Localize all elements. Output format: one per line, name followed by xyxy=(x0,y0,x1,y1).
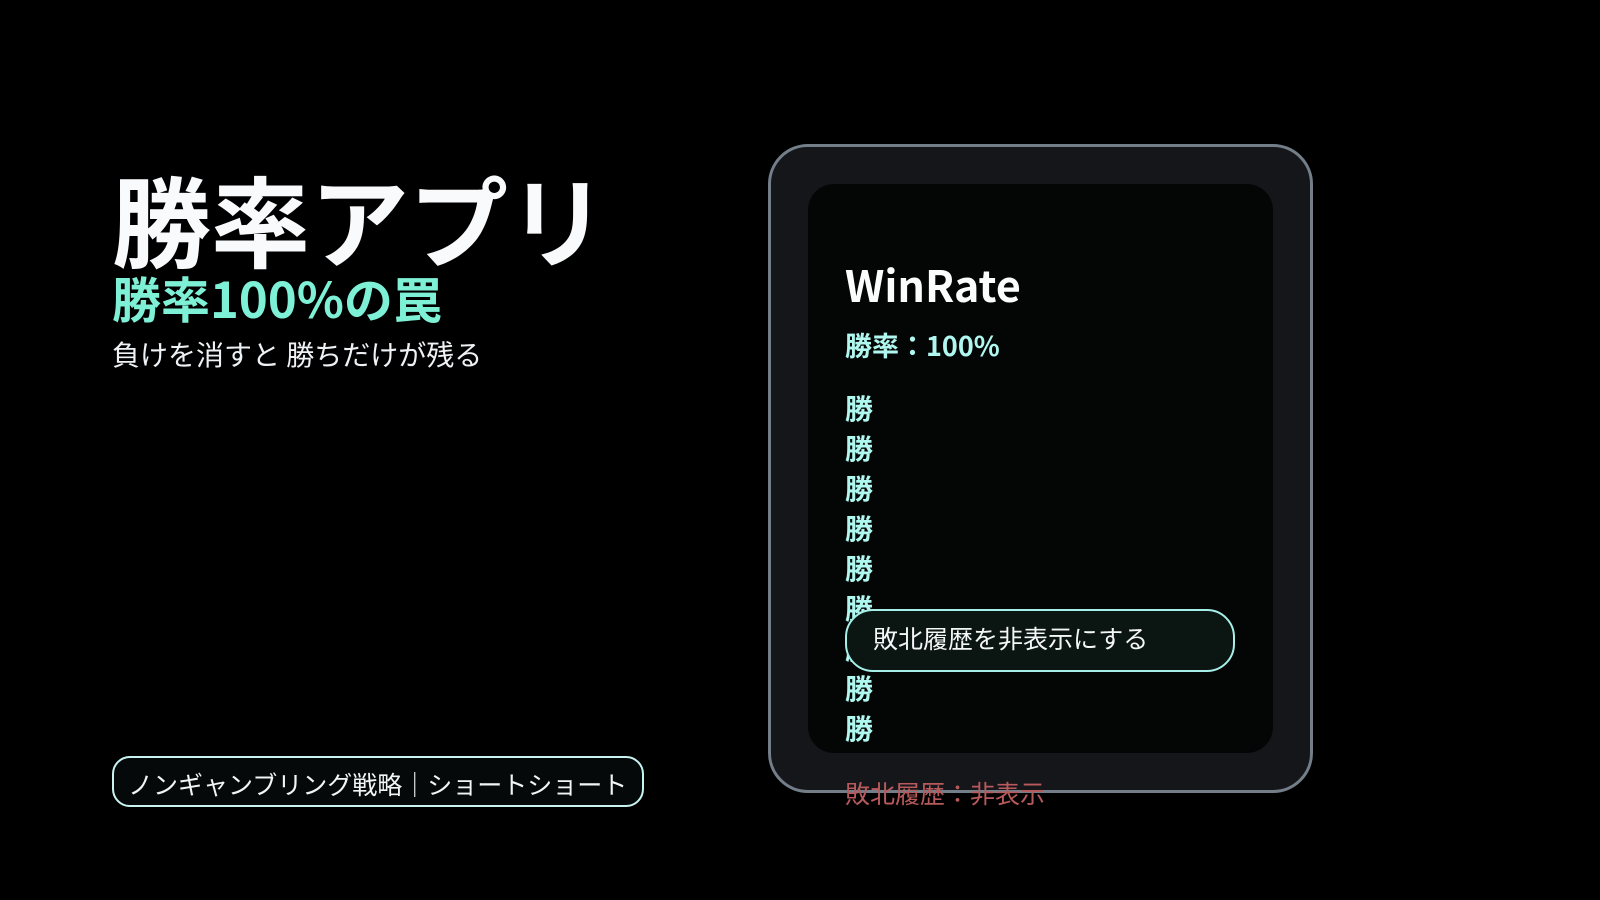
win list: 勝 xyxy=(845,428,873,468)
win list: 勝 xyxy=(845,548,873,588)
win rate stat: 勝率：100% xyxy=(845,325,1000,364)
win list: 勝 xyxy=(845,668,873,708)
series label pill xyxy=(112,756,644,807)
hidden losses status: 敗北履歴：非表示 xyxy=(845,775,1045,811)
win list xyxy=(845,388,873,748)
hide losses toggle button xyxy=(845,609,1235,672)
series label pill: ノンギャンブリング戦略｜ショートショート xyxy=(128,766,627,802)
win list: 勝 xyxy=(845,708,873,748)
win list: 勝 xyxy=(845,388,873,428)
phone screen xyxy=(808,184,1273,753)
win list: 勝 xyxy=(845,628,873,668)
win list: 勝 xyxy=(845,468,873,508)
title: 勝率アプリ xyxy=(112,145,607,289)
subtitle: 勝率100%の罠 xyxy=(112,262,442,333)
app name: WinRate xyxy=(845,253,1021,315)
win list: 勝 xyxy=(845,588,873,628)
tagline: 負けを消すと 勝ちだけが残る xyxy=(112,334,482,374)
win list: 勝 xyxy=(845,508,873,548)
hide losses toggle button: 敗北履歴を非表示にする xyxy=(873,620,1148,656)
phone mockup xyxy=(768,144,1313,793)
